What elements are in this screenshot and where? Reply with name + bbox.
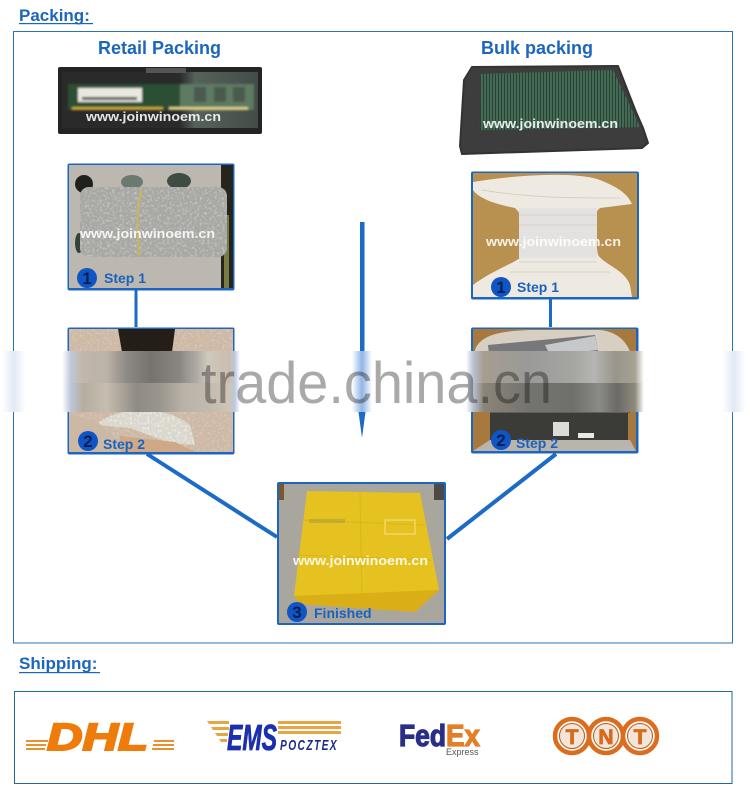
watermark: www.joinwinoem.cn — [485, 234, 621, 249]
step badge: 1 — [82, 269, 92, 288]
logo: DHL: DHL — [47, 717, 148, 759]
step badge: Step 1 — [104, 270, 146, 286]
watermark: www.joinwinoem.cn — [292, 553, 428, 568]
photo: retail step 2 — [68, 328, 234, 454]
step badge: 1 — [496, 278, 506, 297]
step badge — [77, 268, 146, 288]
connector lines and arrow backdrop — [136, 290, 556, 539]
logo: FedEx Express: Ex — [446, 718, 481, 753]
logo: TNT: N — [598, 726, 614, 749]
panel: shipping — [14, 692, 732, 784]
logo: TNT: T — [634, 726, 647, 749]
logo: TNT — [555, 719, 657, 753]
step badge: Step 2 — [103, 436, 145, 452]
step badge — [491, 277, 559, 297]
heading: Shipping: Shipping: — [19, 654, 97, 673]
logo: EMS Poczta — [207, 717, 341, 758]
logo: FedEx Express — [399, 718, 481, 757]
logo: FedEx Express: Express — [446, 747, 479, 757]
logo: TNT: T — [566, 726, 579, 749]
logo: EMS Poczta: POCZTEX — [280, 737, 338, 754]
photo: finished — [277, 482, 446, 625]
watermark text: trade.china.cn — [201, 351, 552, 416]
watermark band — [2, 351, 746, 416]
step badge: 3 — [292, 603, 302, 622]
heading: Packing: Packing: — [19, 6, 90, 25]
photo: bulk step 1 — [471, 172, 639, 300]
photo: retail box — [58, 67, 262, 134]
logo: EMS Poczta: EMS — [227, 717, 277, 758]
photo: bulk tray — [460, 66, 648, 154]
step badge: Finished — [314, 605, 372, 621]
watermark: www.joinwinoem.cn — [85, 109, 221, 124]
step badge: Step 2 — [516, 435, 558, 451]
heading: Retail Packing: Retail Packing — [98, 38, 221, 58]
step badge: Step 1 — [517, 279, 559, 295]
arrow: downward — [358, 222, 366, 438]
step badge: 2 — [83, 432, 93, 451]
watermark: www.joinwinoem.cn — [79, 226, 215, 241]
step badge — [491, 430, 558, 451]
step badge — [287, 602, 372, 622]
step badge — [78, 431, 145, 452]
heading: Bulk packing: Bulk packing — [481, 38, 593, 58]
logo: FedEx Express: Fed — [399, 718, 446, 753]
step badge: 2 — [496, 431, 506, 450]
watermark: www.joinwinoem.cn — [482, 116, 618, 131]
photo: bulk step 2 — [471, 328, 638, 454]
photo: retail step 1 — [68, 164, 234, 290]
panel: packing — [14, 32, 732, 643]
